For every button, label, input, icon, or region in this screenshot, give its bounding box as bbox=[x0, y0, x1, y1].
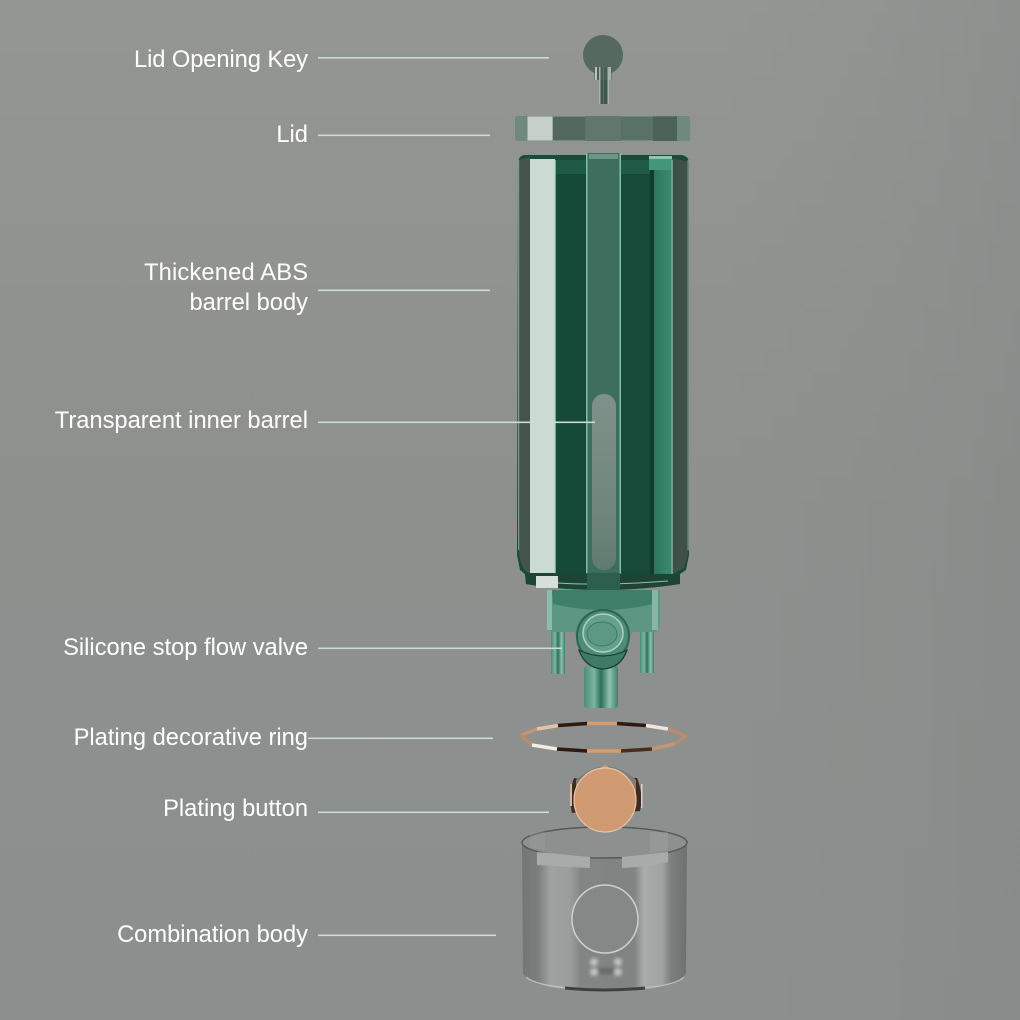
icon: barrel body bbox=[517, 153, 689, 590]
label: Combination body: Combination body bbox=[117, 922, 308, 948]
label: Thickened ABS barrel body: Thickened ABS bbox=[144, 260, 308, 286]
label: Thickened ABS barrel body: barrel body bbox=[189, 290, 308, 316]
label: Plating decorative ring: Plating decorative ring bbox=[74, 725, 308, 751]
icon: plating decorative ring bbox=[521, 724, 686, 751]
label: Lid: Lid bbox=[276, 122, 308, 148]
label: Silicone stop flow valve: Silicone stop flow valve bbox=[63, 635, 308, 661]
label: Transparent inner barrel: Transparent inner barrel bbox=[55, 408, 308, 434]
label: Lid Opening Key: Lid Opening Key bbox=[134, 47, 308, 73]
icon: combination body bbox=[522, 827, 687, 991]
icon: silicone stop flow valve bbox=[547, 590, 660, 708]
icon: lid bbox=[515, 116, 690, 141]
label: Plating button: Plating button bbox=[163, 796, 308, 822]
icon: valve stems behind bbox=[551, 630, 654, 674]
icon: plating button bbox=[570, 765, 642, 832]
icon: lid opening key bbox=[583, 35, 623, 104]
label: Thickened ABS barrel body bbox=[144, 260, 490, 316]
inner barrel window bbox=[592, 394, 616, 570]
